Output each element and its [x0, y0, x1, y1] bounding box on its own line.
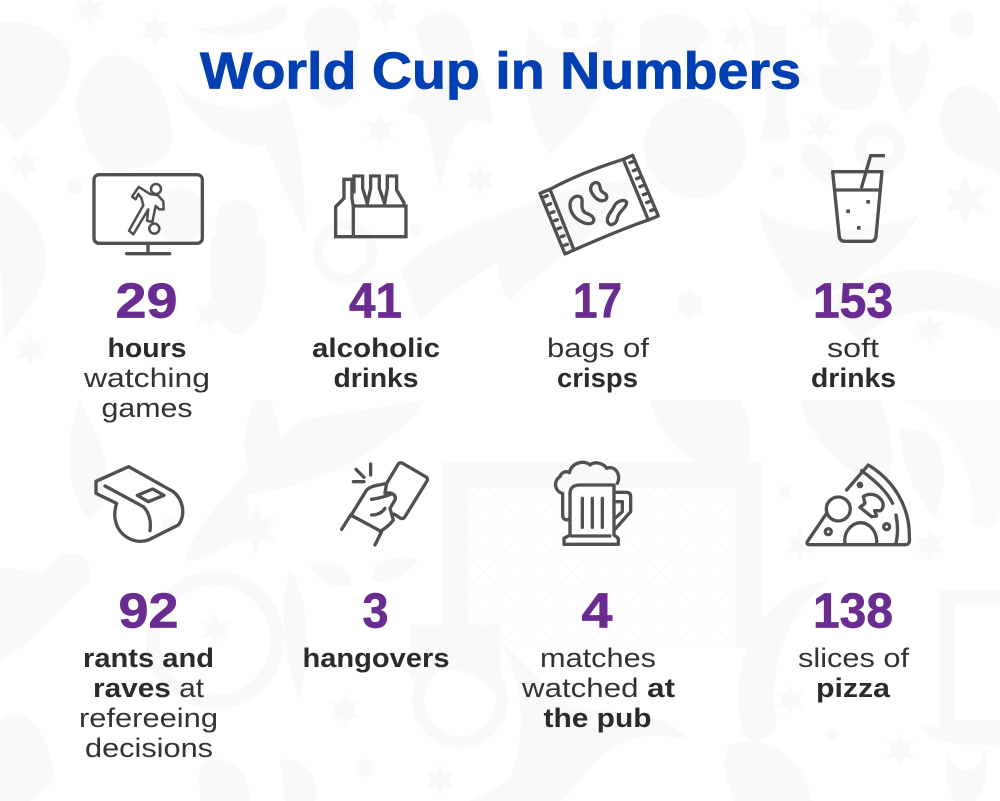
number: 3: 3 [362, 584, 388, 638]
number: 17: 17 [573, 274, 622, 328]
number: 4: 4 [582, 584, 612, 638]
number: 29: 29 [116, 274, 178, 328]
stat: 138 slices of pizza [798, 465, 910, 703]
icon: crate of bottles [336, 176, 406, 237]
icon: glass with straw [833, 156, 885, 241]
label: hours watching games [83, 333, 210, 423]
stat: 29 hours watching games [83, 175, 210, 423]
label: alcoholic drinks [312, 333, 440, 393]
label: matches watched at the pub: watched at [521, 673, 675, 703]
stat: 92 rants and raves [79, 467, 218, 763]
label: matches watched at the pub: matches [540, 643, 656, 673]
label: slices of pizza: pizza [816, 673, 891, 703]
label: rants and raves at refereeing decisions: rants and [83, 643, 214, 673]
label: rants and raves at refereeing decisions: raves at [93, 673, 205, 703]
label: soft drinks [811, 333, 896, 393]
label: bags of crisps: crisps [557, 363, 638, 393]
label: rants and raves at refereeing decisions [79, 643, 218, 763]
label: hours watching games: hours [108, 333, 186, 363]
stat: 17 bags of crisps [540, 155, 658, 393]
icon: hand holding card [342, 463, 427, 545]
icon: whistle [96, 467, 183, 541]
stat: 153 soft drinks [811, 156, 896, 393]
label: hours watching games: watching [83, 363, 210, 393]
label: slices of pizza: slices of [798, 643, 910, 673]
label: bags of crisps: bags of [547, 333, 650, 363]
stat: 3 hangovers [302, 463, 450, 673]
stat: 41 alcoholic drinks [312, 176, 440, 393]
label: alcoholic drinks: drinks [334, 363, 418, 393]
label: hangovers: hangovers [302, 643, 450, 673]
icon: bag of crisps [540, 155, 658, 254]
title: World Cup in Numbers [200, 42, 801, 100]
icon: tv with football player [94, 175, 202, 254]
label: slices of pizza [798, 643, 910, 703]
label: soft drinks: drinks [811, 363, 896, 393]
label: alcoholic drinks: alcoholic [312, 333, 440, 363]
number: 92: 92 [118, 584, 178, 638]
label: rants and raves at refereeing decisions: refereeing [79, 703, 218, 733]
icon: beer mug [556, 462, 631, 544]
number: 138: 138 [813, 584, 893, 638]
label: rants and raves at refereeing decisions: decisions [85, 733, 213, 763]
label: soft drinks: soft [827, 333, 880, 363]
label: matches watched at the pub [521, 643, 675, 733]
icon: pizza slice [807, 465, 910, 545]
label: bags of crisps [547, 333, 650, 393]
number: 41: 41 [349, 274, 402, 328]
label: hours watching games: games [102, 393, 192, 423]
stat: 4 matches at the pub [521, 462, 675, 733]
label: matches watched at the pub: the pub [544, 703, 652, 733]
number: 153: 153 [813, 274, 893, 328]
